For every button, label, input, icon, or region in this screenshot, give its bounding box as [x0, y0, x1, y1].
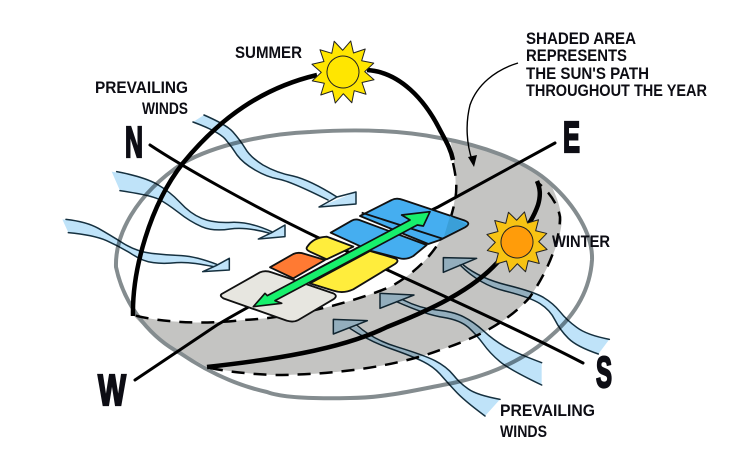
label: prevailing winds upper — [95, 79, 188, 118]
panel: off-white — [221, 271, 336, 322]
callout arrow to shaded area — [467, 63, 518, 167]
wind arrow: upper 1 — [193, 115, 356, 207]
label: prevailing winds lower: PREVAILING — [500, 402, 595, 420]
wind arrow: upper 3 — [62, 219, 229, 272]
callout text: shaded area: THROUGHOUT THE YEAR — [526, 82, 707, 100]
solar panels and building plan — [221, 199, 468, 322]
wind arrow: lower 2 — [380, 293, 542, 385]
compass label: east: E — [563, 113, 580, 162]
callout text: shaded area: REPRESENTS — [526, 47, 627, 65]
compass label: west: W — [98, 366, 126, 415]
callout text: shaded area: THE SUN'S PATH — [526, 65, 649, 83]
summer sun arc — [133, 70, 453, 316]
label: prevailing winds upper: PREVAILING — [95, 79, 188, 97]
label: prevailing winds lower: WINDS — [500, 423, 547, 441]
north-south axis line — [150, 145, 583, 363]
panel: upper yellow — [307, 237, 353, 259]
panel divider line — [362, 213, 442, 239]
panel: lower yellow — [310, 251, 397, 292]
wind arrow: lower 1 — [443, 258, 609, 354]
east-west axis line — [135, 143, 555, 380]
winter sun arc — [207, 181, 540, 367]
compass label: south: S — [596, 348, 612, 397]
callout text: shaded area: SHADED AREA — [526, 30, 636, 48]
dashed edge of shaded area, summer — [133, 163, 456, 322]
label: prevailing winds upper: WINDS — [142, 100, 188, 118]
panel: blue left panel — [331, 219, 427, 259]
icon: summer sun — [304, 33, 382, 111]
wind arrow: lower 3 — [333, 319, 500, 416]
dashed edge of shaded area, winter — [210, 182, 560, 375]
green east-west arrow — [253, 212, 430, 307]
label: winter: WINTER — [552, 233, 610, 251]
label: prevailing winds lower — [500, 402, 595, 441]
icon: winter sun — [479, 204, 555, 280]
panel: blue right panel — [360, 199, 468, 244]
wind arrow: upper 2 — [112, 172, 285, 239]
panel: orange — [270, 253, 325, 278]
callout text: shaded area — [526, 30, 707, 100]
shaded area: sun's path through the year — [133, 138, 562, 375]
label: summer: SUMMER — [235, 44, 302, 62]
ground ellipse outline — [116, 130, 592, 398]
compass label: north: N — [125, 118, 143, 167]
panel: blue shaded corner — [444, 216, 467, 237]
